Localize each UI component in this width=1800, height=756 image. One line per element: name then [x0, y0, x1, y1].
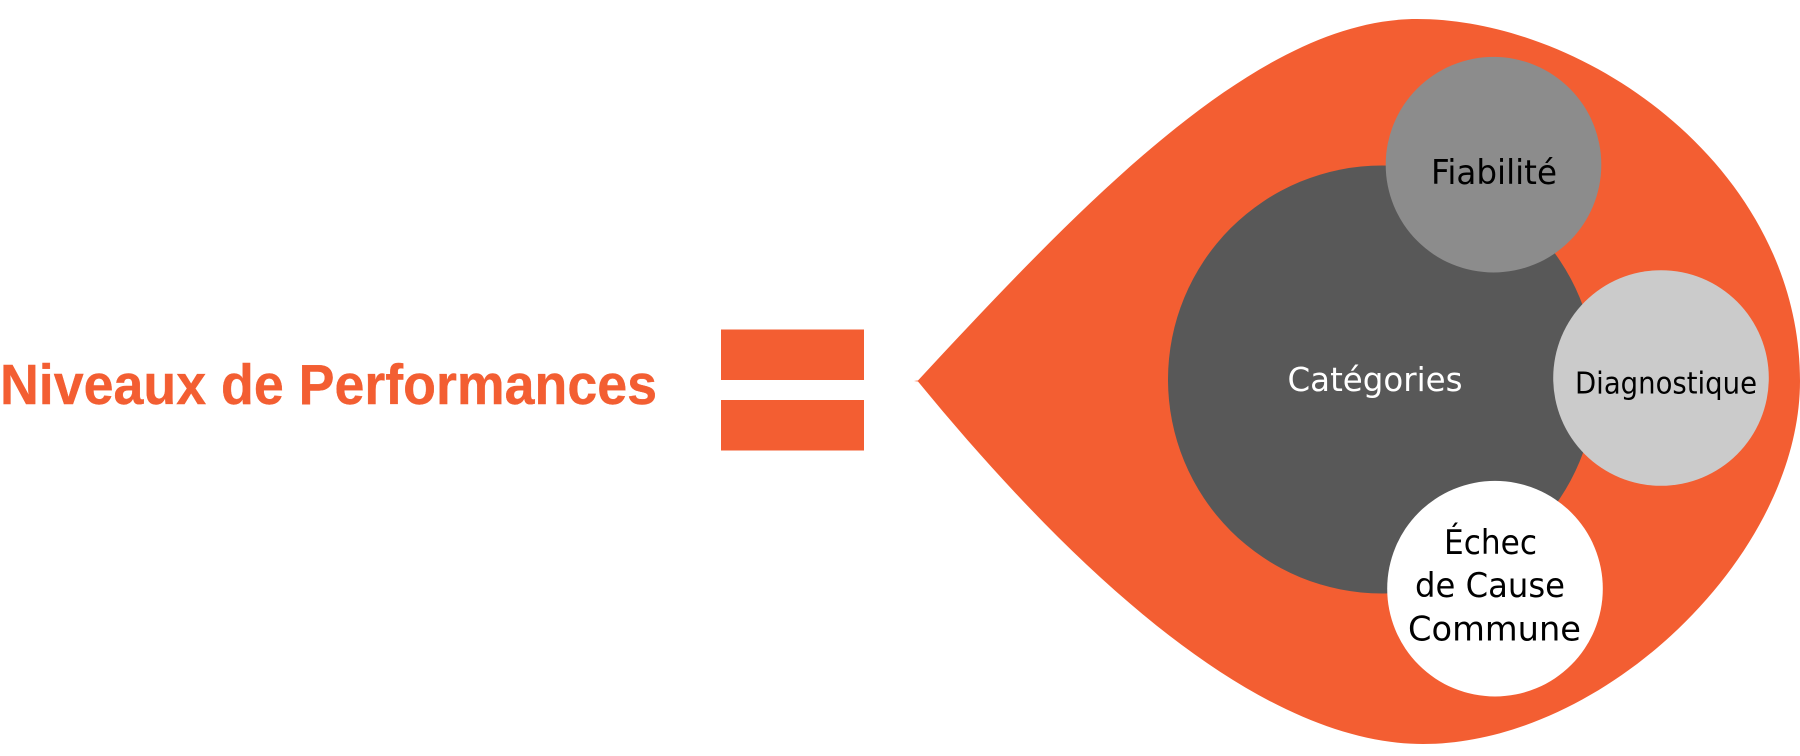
teardrop shape	[914, 19, 1800, 744]
circle: Échec de Cause Commune: Échec	[1444, 522, 1537, 563]
circle: Catégories: Catégories	[1288, 360, 1462, 399]
circle: Échec de Cause Commune	[1387, 481, 1603, 696]
circle: Diagnostique: Diagnostique	[1575, 366, 1757, 402]
circle: Échec de Cause Commune: Commune	[1408, 610, 1581, 650]
circle: Fiabilité: Fiabilité	[1431, 153, 1557, 193]
circle: Échec de Cause Commune: de Cause	[1415, 566, 1565, 606]
title: Niveaux de Performances	[0, 353, 657, 417]
equals sign	[721, 330, 864, 450]
circle: Catégories	[1168, 166, 1596, 594]
circle: Diagnostique	[1553, 270, 1769, 486]
circle: Fiabilité	[1386, 57, 1601, 272]
